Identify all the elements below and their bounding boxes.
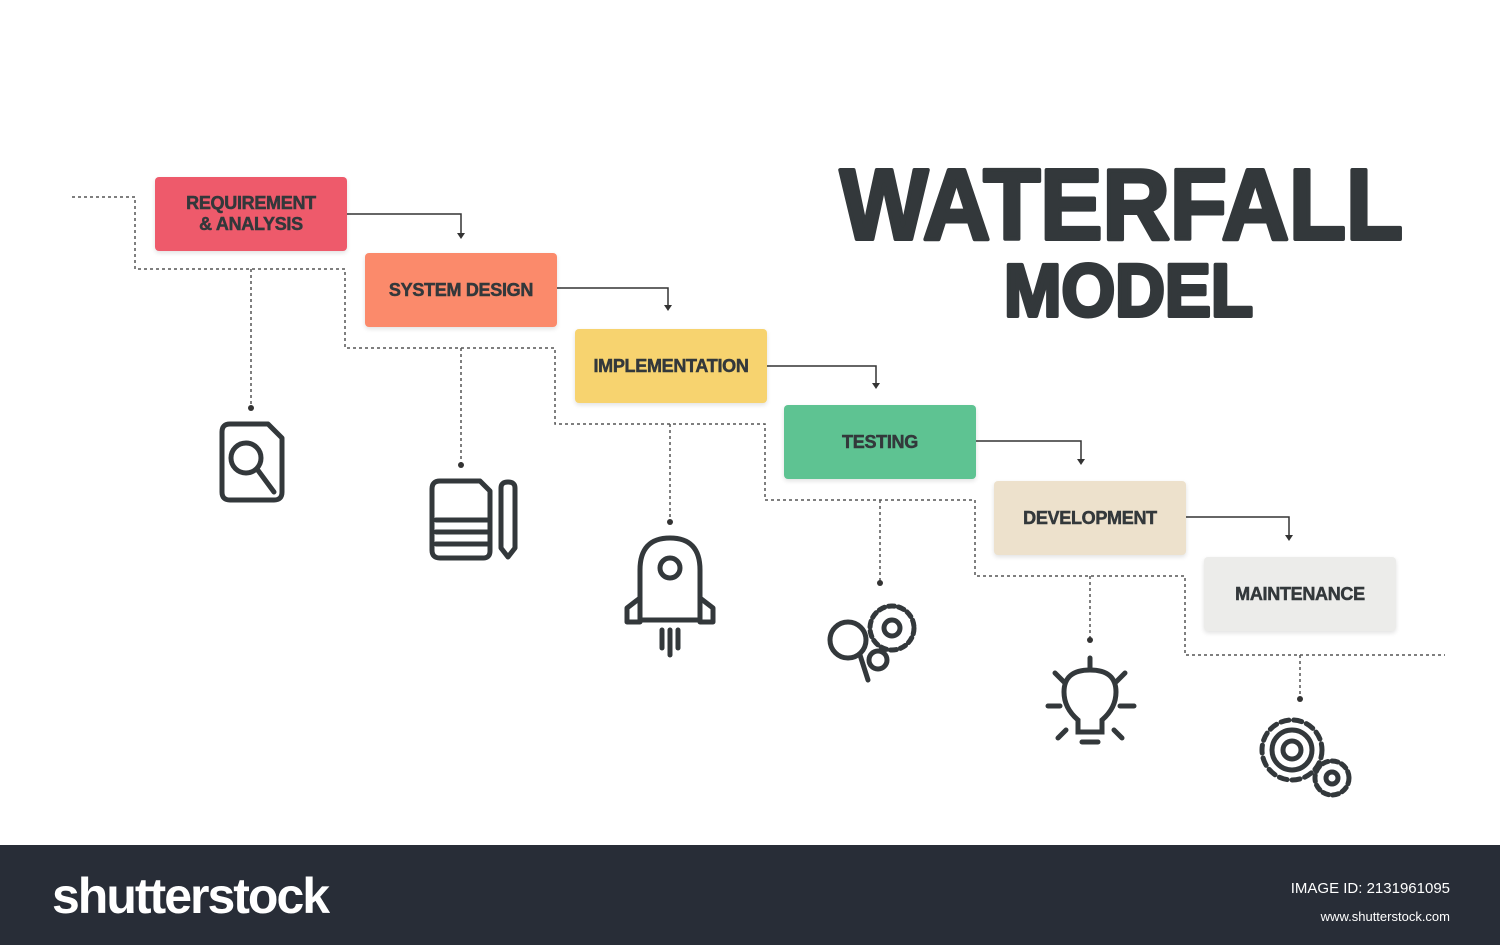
footer info: www.shutterstock.com: [1321, 909, 1450, 924]
footer info: [1291, 880, 1450, 924]
footer info: IMAGE ID: 2131961095: [1291, 880, 1450, 897]
step 5 box: [994, 481, 1186, 555]
step 2 box: [365, 253, 557, 327]
step 4 box: TESTING: [842, 432, 918, 452]
step 4 box: [784, 405, 976, 479]
step 6 box: [1204, 557, 1396, 631]
step 3 box: [575, 329, 767, 403]
footer logo: shutterstock: [52, 868, 328, 924]
icon: rocket: [627, 538, 713, 655]
title: WATERFALL: [840, 149, 1403, 261]
icon: document search: [222, 424, 282, 500]
icon: document with pencil: [432, 481, 515, 558]
step 6 box: MAINTENANCE: [1235, 584, 1365, 604]
arrows between steps: [347, 214, 1289, 536]
step 2 box: SYSTEM DESIGN: [389, 280, 533, 300]
icon: gears: [1262, 720, 1349, 795]
step 5 box: DEVELOPMENT: [1023, 508, 1157, 528]
title: [840, 149, 1403, 332]
step 1 box: & ANALYSIS: [199, 214, 303, 234]
footer bar: [0, 845, 1500, 945]
icon: light bulb: [1048, 658, 1134, 742]
icon: search with gears: [830, 606, 914, 680]
title: MODEL: [1004, 249, 1253, 332]
step 1 box: REQUIREMENT: [186, 193, 316, 213]
step 1 box: [155, 177, 347, 251]
step 3 box: IMPLEMENTATION: [593, 356, 749, 376]
